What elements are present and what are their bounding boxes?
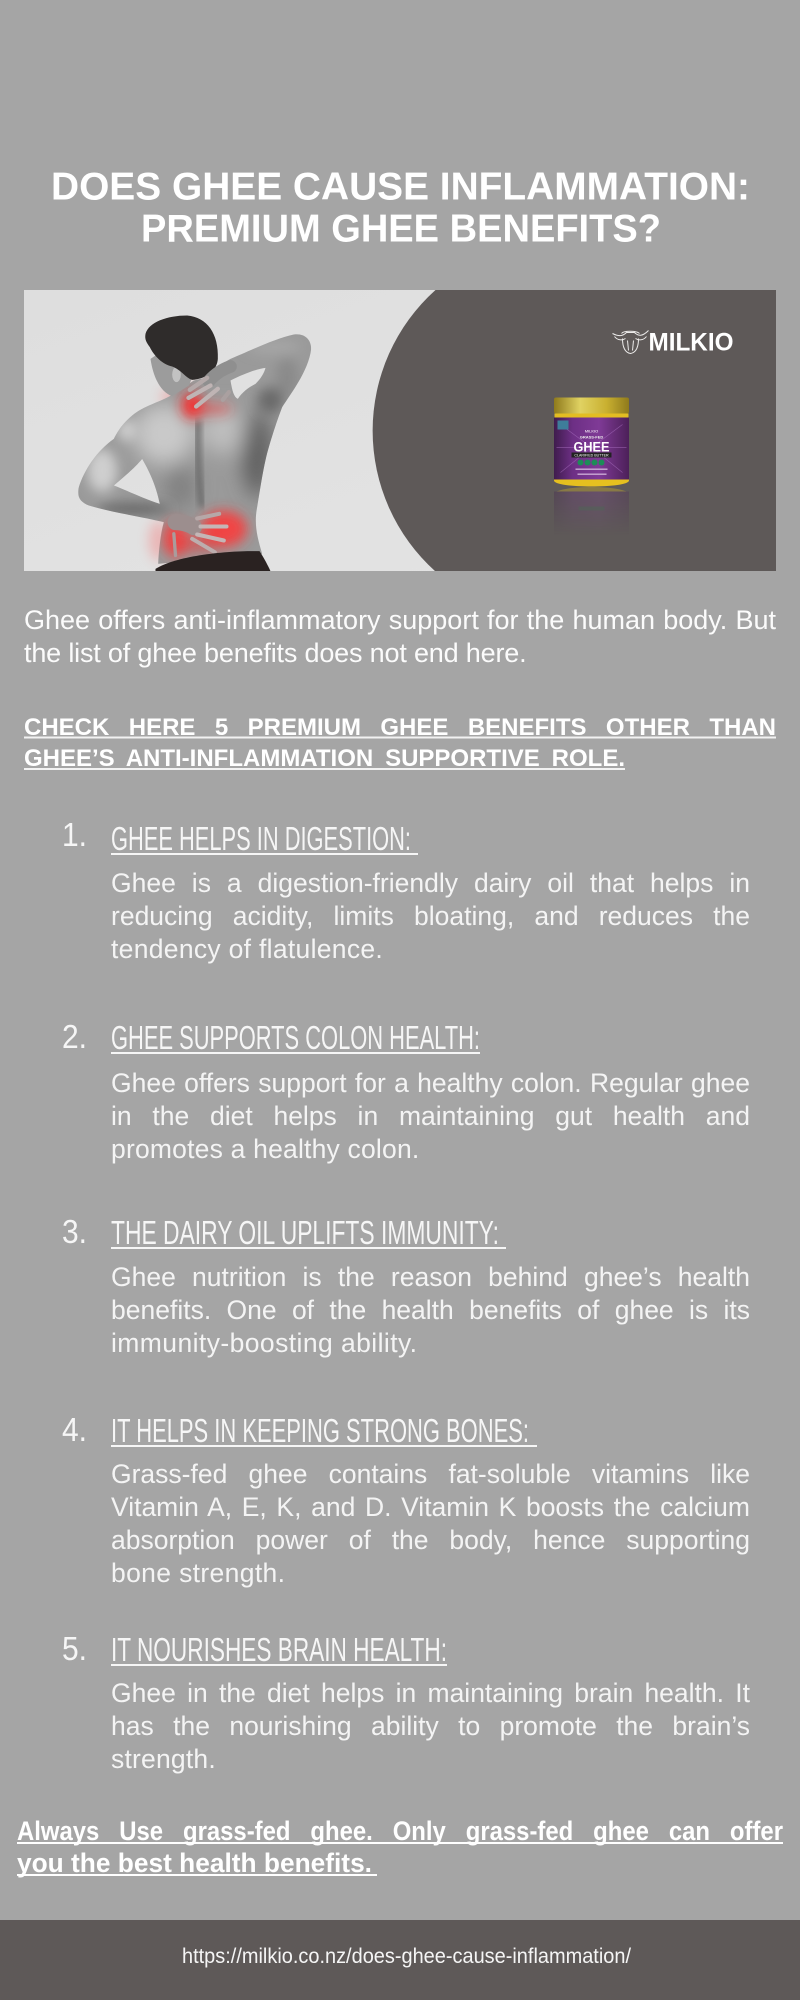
benefit 1 heading (62, 816, 418, 857)
face and ear (150, 352, 192, 396)
intro paragraph (24, 605, 776, 668)
torso and arms (78, 334, 311, 564)
dark curved panel (372, 290, 776, 571)
check here subheading (24, 714, 776, 772)
intro paragraph: the list of ghee benefits does not end here. (24, 638, 526, 668)
black shorts (155, 551, 270, 571)
benefit 3 text: Ghee nutrition is the reason behind ghee’s health (111, 1262, 750, 1292)
yellow base (554, 476, 628, 486)
benefit 3 heading (62, 1213, 506, 1251)
hero image: back pain man and ghee jar (24, 290, 776, 571)
benefit 1 text (111, 868, 750, 964)
benefit 5 heading: 5. (62, 1630, 87, 1667)
product: ghee jar (554, 398, 629, 515)
benefit 4 text: Vitamin A, E, K, and D. Vitamin K boosts the calcium (111, 1492, 750, 1522)
title: PREMIUM GHEE BENEFITS? (141, 208, 661, 250)
purple label: GHEE (573, 438, 609, 454)
benefit 4 text: Grass-fed ghee contains fat-soluble vitamins like (111, 1458, 750, 1488)
title: DOES GHEE CAUSE INFLAMMATION: (51, 166, 750, 208)
icon: cow head (612, 330, 648, 353)
benefit 3 heading: 3. (62, 1213, 87, 1250)
benefit 1 text: reducing acidity, limits bloating, and reduces the (111, 900, 750, 930)
MILKIO logo (612, 328, 733, 356)
jar lid (554, 397, 628, 413)
benefit 1 text: Ghee is a digestion-friendly dairy oil that helps in (111, 868, 750, 898)
benefit 4 heading: IT HELPS IN KEEPING STRONG BONES: (111, 1412, 529, 1449)
yellow rim (554, 413, 628, 417)
benefit 4 text: bone strength. (111, 1558, 285, 1588)
hair (145, 315, 217, 379)
hand on lower back (173, 513, 226, 555)
hand on neck (188, 366, 230, 406)
footer bar (0, 1920, 800, 2000)
benefit 1 text: tendency of flatulence. (111, 934, 383, 964)
benefit 3 heading: THE DAIRY OIL UPLIFTS IMMUNITY: (111, 1214, 499, 1251)
benefit 2 heading (62, 1018, 480, 1056)
closing call to action (17, 1816, 783, 1878)
benefit 4 heading (62, 1411, 537, 1449)
title (51, 166, 750, 250)
jar reflection (554, 487, 629, 515)
benefit 2 heading: 2. (62, 1018, 87, 1055)
benefit 2 text (111, 1068, 750, 1164)
closing call to action: you the best health benefits. (17, 1848, 372, 1878)
benefit 5 heading (62, 1630, 447, 1668)
footer bar: https://milkio.co.nz/does-ghee-cause-inflammation/ (182, 1945, 631, 1968)
purple label: MILKIO (584, 428, 598, 433)
benefit 4 heading: 4. (62, 1411, 87, 1448)
logo wordmark: MILKIO (648, 328, 733, 356)
check here underlines (24, 736, 776, 770)
man with back pain (70, 315, 317, 571)
benefit 2 heading: GHEE SUPPORTS COLON HEALTH: (111, 1019, 480, 1056)
benefit 1 heading: 1. (62, 816, 87, 853)
benefit 5 text (111, 1678, 750, 1774)
check here subheading: GHEE’S ANTI-INFLAMMATION SUPPORTIVE ROLE. (24, 745, 625, 772)
benefit 1 heading: GHEE HELPS IN DIGESTION: (111, 820, 411, 857)
benefit 5 text: strength. (111, 1744, 216, 1774)
benefit 2 text: in the diet helps in maintaining gut health and (111, 1100, 750, 1130)
benefit 2 text: promotes a healthy colon. (111, 1134, 419, 1164)
purple label: GRASS-FED (579, 434, 603, 439)
red glow behind body (148, 385, 220, 560)
purple label: CLARIFIED BUTTER (574, 453, 608, 457)
benefit 5 heading: IT NOURISHES BRAIN HEALTH: (111, 1631, 447, 1668)
benefit 3 text (111, 1262, 750, 1358)
benefit 3 text: immunity-boosting ability. (111, 1328, 417, 1358)
benefit 4 text: absorption power of the body, hence supporting (111, 1524, 750, 1554)
benefit 4 text (111, 1458, 750, 1588)
check here subheading: CHECK HERE 5 PREMIUM GHEE BENEFITS OTHER THAN (24, 714, 776, 741)
purple label (554, 417, 628, 479)
benefit 5 text: Ghee in the diet helps in maintaining brain health. It (111, 1678, 750, 1708)
benefit 5 text: has the nourishing ability to promote the brain’s (111, 1710, 750, 1740)
benefit 2 text: Ghee offers support for a healthy colon. Regular ghee (111, 1068, 750, 1098)
light photo background (24, 290, 776, 571)
benefit 3 text: benefits. One of the health benefits of ghee is its (111, 1294, 750, 1324)
intro paragraph: Ghee offers anti-inflammatory support for the human body. But (24, 605, 776, 635)
